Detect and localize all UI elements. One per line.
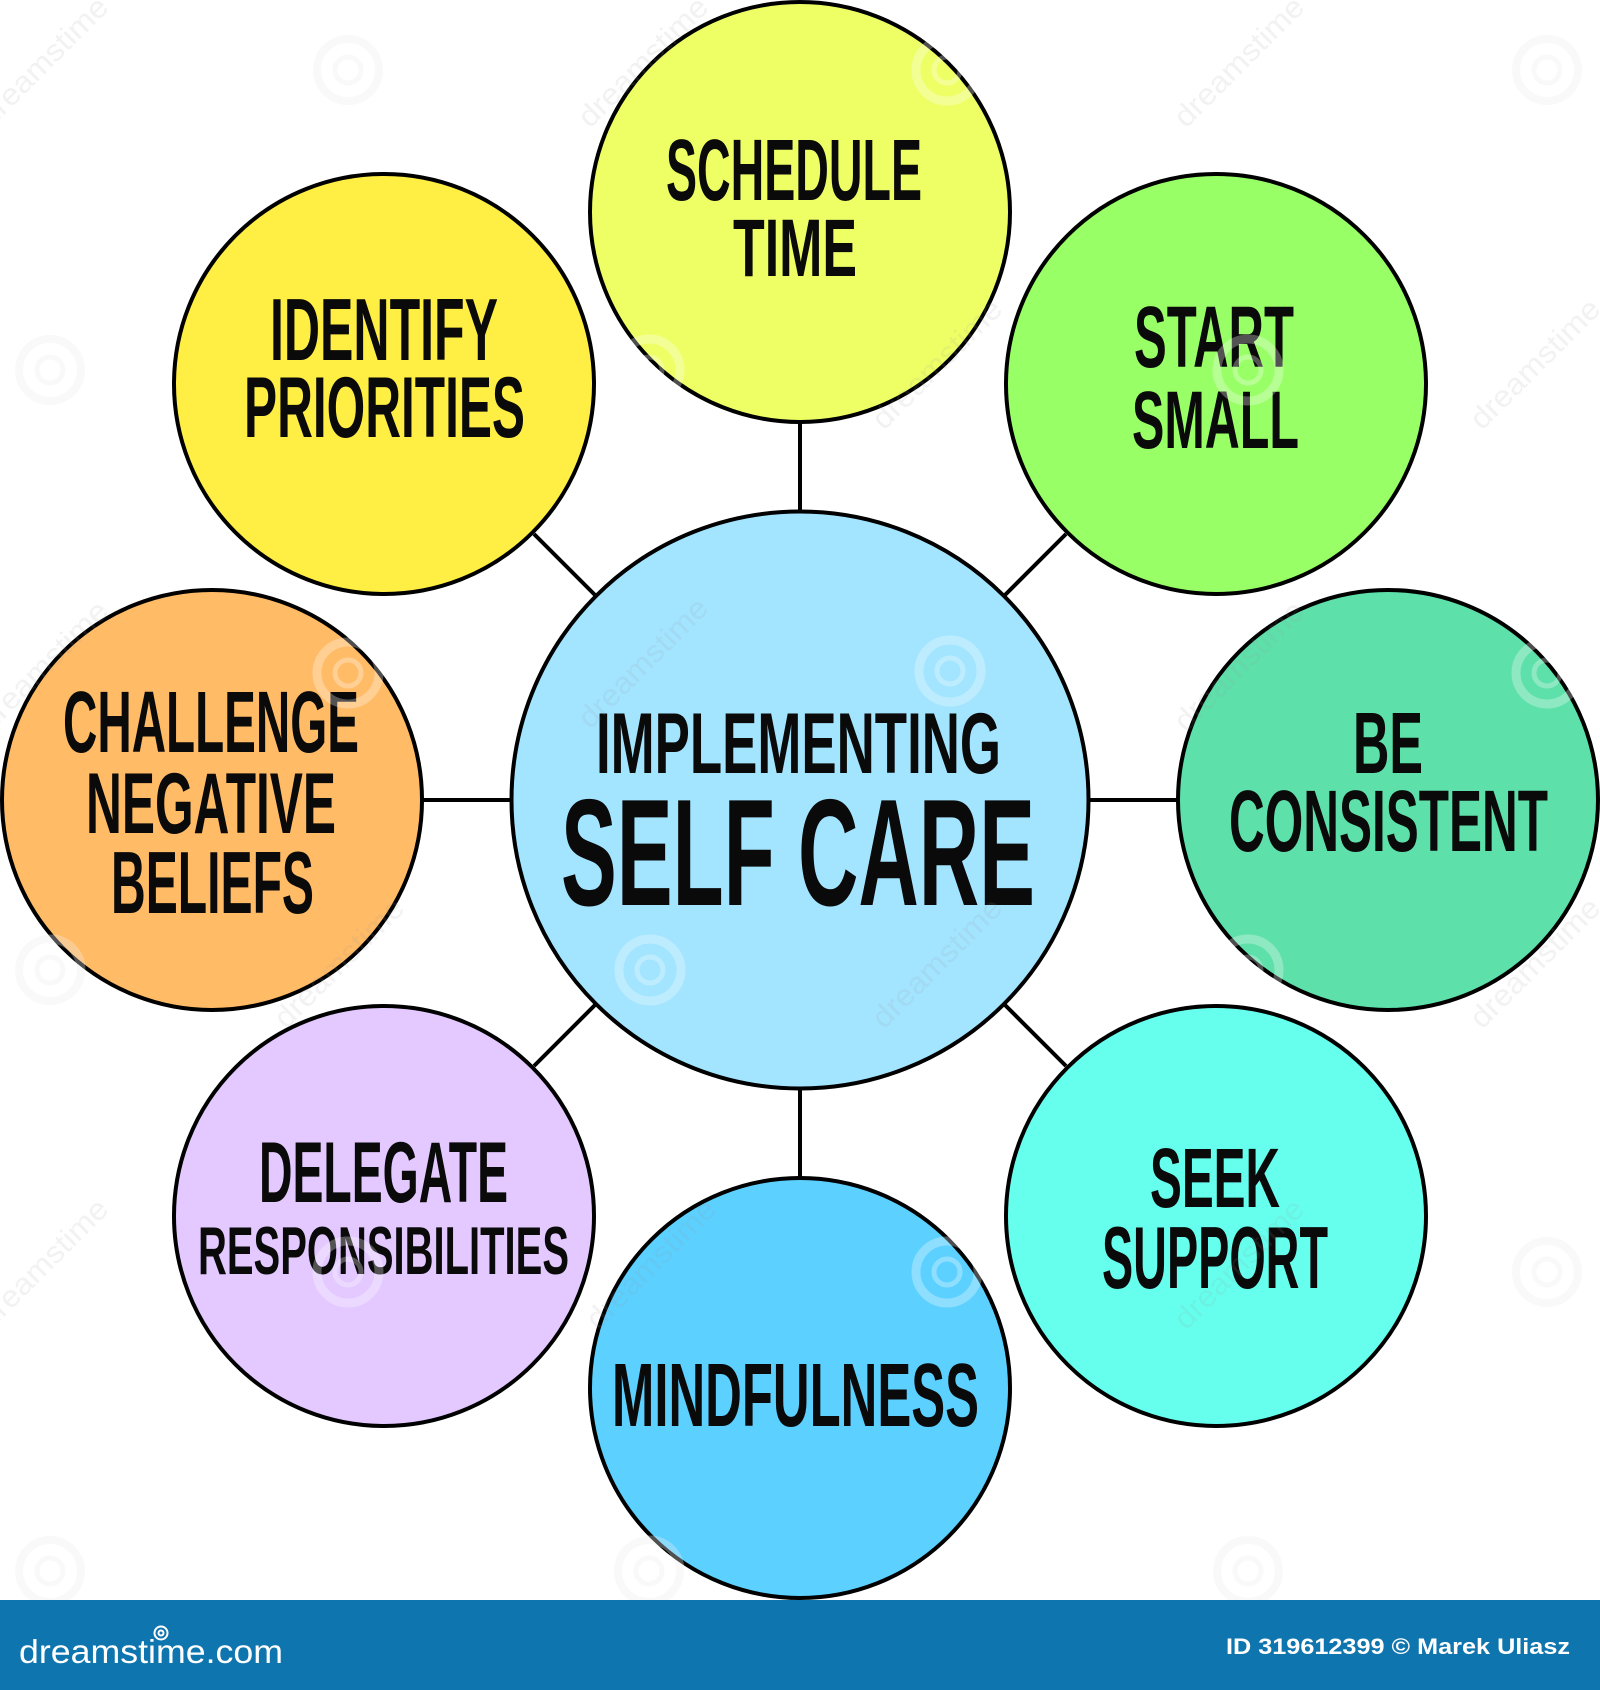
watermark text: dreamstime	[268, 891, 411, 1035]
node: schedule time: SCHEDULE	[666, 122, 922, 219]
watermark text: dreamstime	[1168, 594, 1311, 738]
center heading small: IMPLEMENTING	[596, 696, 1001, 792]
node: identify priorities: IDENTIFY	[270, 280, 498, 379]
footer bar	[0, 1600, 1600, 1690]
node: schedule time: TIME	[733, 203, 857, 294]
node: delegate responsibilities: RESPONSIBILITIES	[198, 1213, 569, 1289]
node: challenge negative beliefs: NEGATIVE	[86, 756, 336, 852]
node: identify priorities: PRIORITIES	[244, 360, 525, 456]
node: schedule time	[590, 2, 1010, 422]
node: challenge negative beliefs: BELIEFS	[111, 833, 314, 932]
footer logo text: dreamstime.com	[19, 1633, 283, 1670]
node: be consistent	[1178, 590, 1598, 1010]
node: delegate responsibilities	[174, 1006, 594, 1426]
node: seek support: SEEK	[1150, 1131, 1280, 1225]
node: start small: START	[1134, 289, 1294, 386]
node: challenge negative beliefs: CHALLENGE	[63, 674, 359, 771]
watermark text: dreamstime	[572, 0, 715, 134]
watermark text: dreamstime	[866, 891, 1009, 1035]
node: identify priorities	[174, 174, 594, 594]
node: start small: SMALL	[1132, 375, 1299, 466]
node: seek support: SUPPORT	[1102, 1208, 1328, 1307]
watermark text: dreamstime	[1168, 1192, 1311, 1336]
node: challenge negative beliefs	[2, 590, 422, 1010]
watermark text: dreamstime	[1464, 292, 1600, 436]
connector lines	[422, 422, 1178, 1178]
watermark text: dreamstime	[866, 292, 1009, 436]
node: seek support	[1006, 1006, 1426, 1426]
node: mindfulness: MINDFULNESS	[612, 1346, 979, 1446]
center circle: implementing self care	[512, 512, 1088, 1088]
node: delegate responsibilities: DELEGATE	[259, 1125, 508, 1221]
watermark text: dreamstime	[580, 1192, 723, 1336]
node: be consistent: BE	[1353, 695, 1423, 792]
node: start small	[1006, 174, 1426, 594]
watermark text: dreamstime	[1168, 0, 1311, 134]
watermark text: dreamstime	[572, 591, 715, 735]
center heading large: SELF CARE	[561, 768, 1035, 938]
footer logo mark	[154, 1626, 168, 1640]
footer credit: ID 319612399 © Marek Uliasz	[1226, 1634, 1570, 1659]
watermark text: dreamstime	[1464, 891, 1600, 1035]
watermark text	[0, 0, 1600, 1336]
node: mindfulness	[590, 1178, 1010, 1598]
